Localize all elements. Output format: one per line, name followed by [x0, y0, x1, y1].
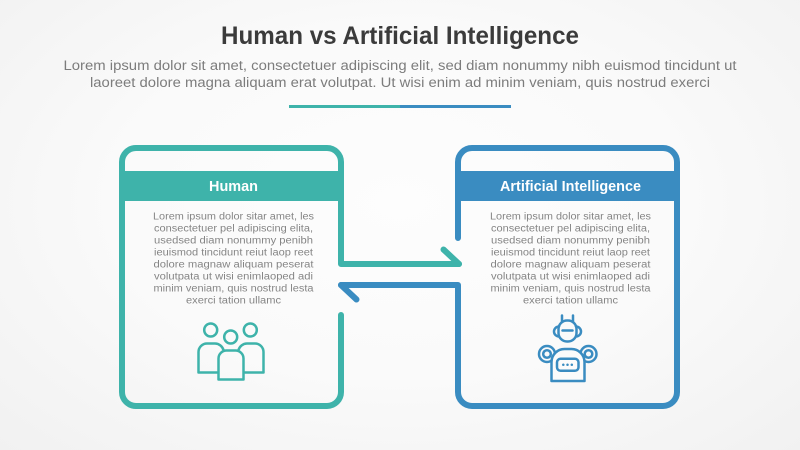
icon: robot	[539, 316, 596, 381]
subtitle paragraph: laoreet dolore magna aliquam erat volutpat. Ut wisi enim ad minim veniam, quis nostrud exerci	[90, 75, 710, 90]
AI panel text: minim veniam, quis nostrud lesta	[490, 284, 651, 294]
human panel text: Lorem ipsum dolor sitar amet, les	[153, 212, 314, 222]
human panel text: volutpata ut wisi enimlaoped adi	[154, 272, 313, 282]
human panel header band: Human	[209, 179, 258, 195]
AI panel text: usedsed diam nonummy penibh	[491, 236, 650, 246]
AI panel text: exerci tation ullamc	[523, 296, 618, 306]
AI panel text: consectetuer pel adipiscing elita,	[491, 224, 650, 234]
human panel text: consectetuer pel adipiscing elita,	[154, 224, 313, 234]
title: Human vs Artificial Intelligence	[221, 22, 579, 50]
AI panel text	[490, 212, 651, 306]
AI panel header band	[458, 171, 676, 201]
human panel text: ieuismod tincidunt reiut laop reet	[154, 248, 313, 258]
subtitle paragraph: Lorem ipsum dolor sit amet, consectetuer adipiscing elit, sed diam nonummy nibh euismod tincidunt ut	[64, 58, 737, 73]
panel: human	[122, 148, 459, 406]
subtitle paragraph	[64, 58, 737, 90]
AI panel outline with arrow to human	[341, 148, 677, 406]
human panel text: exerci tation ullamc	[186, 296, 281, 306]
AI panel text: dolore magnaw aliquam peserat	[490, 260, 651, 270]
AI panel text: volutpata ut wisi enimlaoped adi	[491, 272, 650, 282]
human panel text: usedsed diam nonummy penibh	[154, 236, 313, 246]
human panel text	[153, 212, 314, 306]
human panel text: dolore magnaw aliquam peserat	[154, 260, 314, 270]
AI panel text: Lorem ipsum dolor sitar amet, les	[490, 212, 651, 222]
human panel text: minim veniam, quis nostrud lesta	[154, 284, 314, 294]
human panel outline with arrow to AI	[122, 148, 459, 406]
AI panel header band: Artificial Intelligence	[500, 179, 641, 195]
human panel header band	[122, 171, 340, 201]
icon: people	[198, 324, 264, 380]
title divider	[289, 105, 511, 108]
AI panel text: ieuismod tincidunt reiut laop reet	[491, 248, 650, 258]
panel: artificial intelligence	[341, 148, 677, 406]
